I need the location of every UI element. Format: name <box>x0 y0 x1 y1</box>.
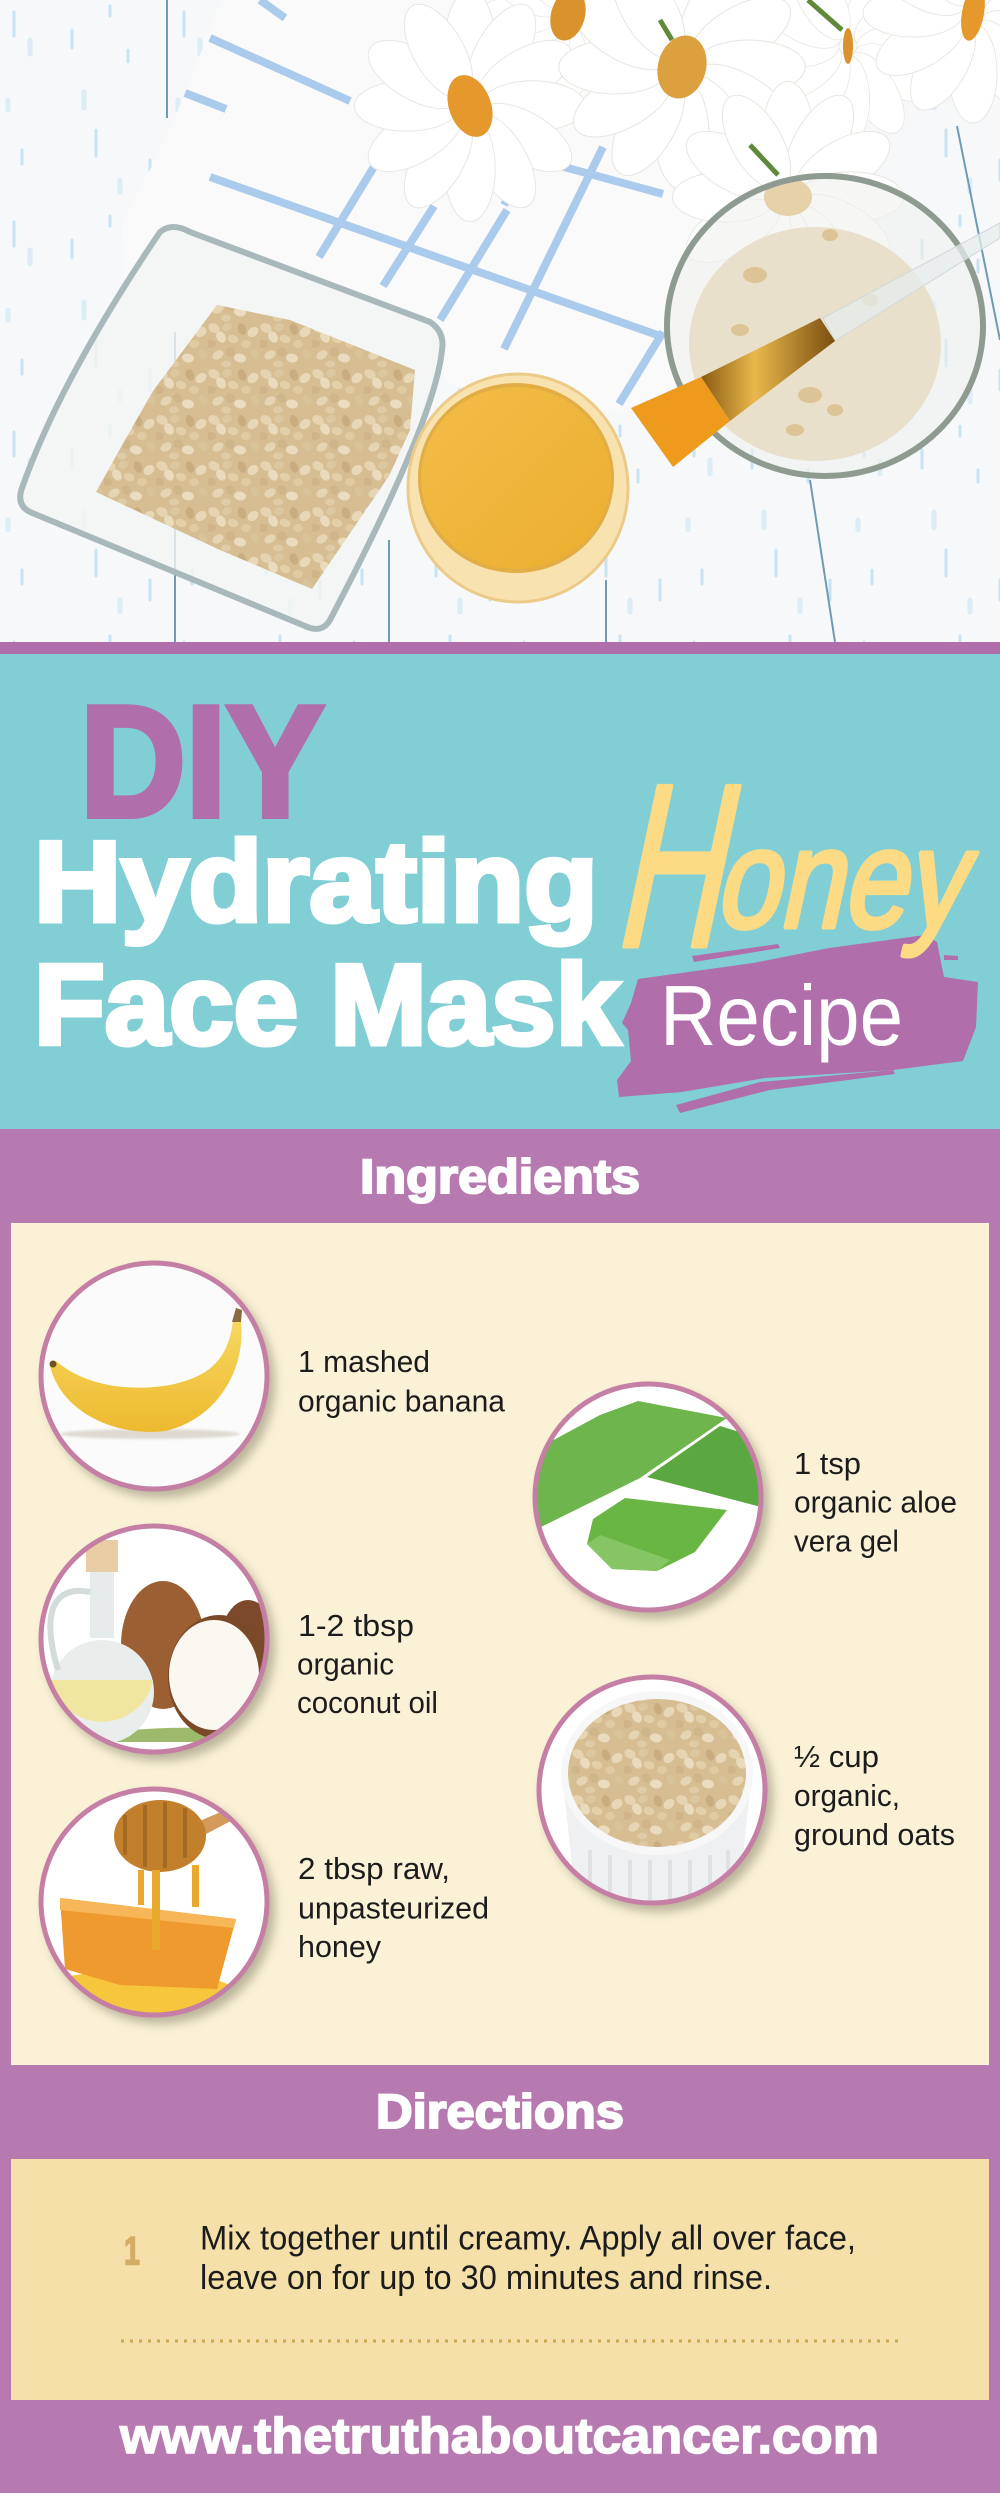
honey text <box>298 1851 489 1964</box>
aloe text: 1 tsp <box>794 1446 861 1481</box>
banana text <box>298 1344 506 1418</box>
footer: website: www.thetruthaboutcancer.com <box>119 2408 879 2464</box>
oats picture <box>542 1680 762 1900</box>
coconut oil text: 1-2 tbsp <box>298 1608 414 1643</box>
ingredient: ground oats <box>530 1670 955 1912</box>
brush stroke behind Recipe <box>617 935 978 1113</box>
panel: ingredients <box>11 1223 989 2065</box>
rolled oats in dish <box>96 305 415 589</box>
ingredient: honey <box>29 1785 489 2025</box>
oats text: organic, <box>794 1778 900 1813</box>
oats text: ground oats <box>794 1817 955 1852</box>
title: Face Mask: Face Mask <box>34 942 621 1069</box>
title: Hydrating: Hydrating <box>34 819 598 946</box>
aloe text: vera gel <box>794 1524 899 1558</box>
banana picture <box>44 1266 264 1486</box>
coconut oil text <box>297 1608 438 1720</box>
honey text: 2 tbsp raw, <box>298 1851 450 1886</box>
wooden board background <box>0 0 1000 642</box>
banana text: 1 mashed <box>298 1344 430 1379</box>
board seams <box>167 0 1000 642</box>
daisies <box>354 0 1000 263</box>
honey text: honey <box>298 1929 381 1964</box>
honey text: unpasteurized <box>298 1890 489 1926</box>
mask bowl <box>667 176 983 476</box>
word: Honey <box>601 736 989 995</box>
honey picture <box>44 1792 264 2012</box>
coconut oil picture <box>44 1528 264 1750</box>
cream background <box>11 1223 989 2065</box>
step text <box>200 2220 856 2297</box>
heading: Ingredients: Ingredients <box>360 1151 640 1204</box>
aloe text <box>794 1446 957 1558</box>
letter H: H <box>601 736 763 995</box>
coconut oil text: coconut oil <box>297 1685 438 1720</box>
brush <box>631 223 1000 467</box>
heading: Directions: Directions <box>376 2086 624 2139</box>
banana text: organic banana <box>298 1384 506 1418</box>
hero photo: oats, honey, mask and daisies <box>0 0 1000 642</box>
ingredient: aloe vera <box>525 1375 957 1620</box>
title: DIY: DIY <box>80 674 324 850</box>
purple band under photo <box>0 642 1000 654</box>
step number: 1 <box>124 2230 140 2274</box>
oats text <box>794 1739 955 1852</box>
glass dish <box>20 227 442 629</box>
glass of honey <box>408 374 628 602</box>
teal background <box>0 654 1000 1129</box>
panel: directions <box>11 2159 989 2400</box>
directions background <box>11 2159 989 2400</box>
oats text: ½ cup <box>794 1739 879 1774</box>
towel <box>126 0 712 406</box>
aloe picture <box>538 1386 758 1608</box>
coconut oil text: organic <box>297 1646 394 1682</box>
word: Recipe: Recipe <box>660 969 903 1064</box>
aloe text: organic aloe <box>794 1484 957 1520</box>
step text: Mix together until creamy. Apply all over face, <box>200 2220 856 2258</box>
step text: leave on for up to 30 minutes and rinse. <box>200 2259 772 2297</box>
ingredient: coconut oil <box>30 1520 438 1761</box>
title panel <box>0 654 1000 1129</box>
ingredient: banana <box>30 1255 506 1498</box>
